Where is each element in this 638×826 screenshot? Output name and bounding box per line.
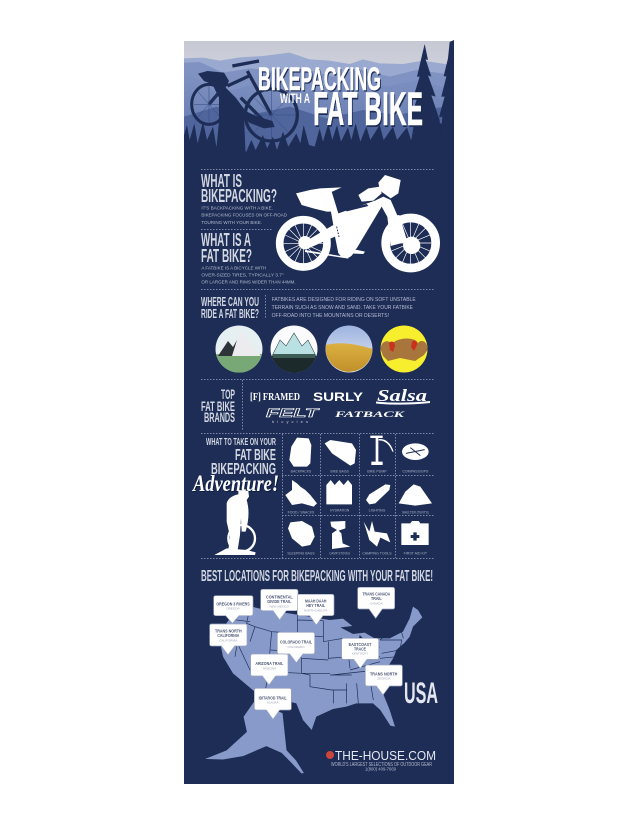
callout: Oregon Loop: OREGON <box>226 607 240 611</box>
icon: food and snacks <box>285 480 317 507</box>
heading: what to take: BIKEPACKING <box>211 461 276 478</box>
callout: Oregon Loop: OREGON 3 RIVERS <box>216 602 250 607</box>
callout: Iditarod Trail: ALASKA <box>267 701 278 705</box>
text block: bikepacking definition: IT'S BACKPACKING WITH A BIKE. <box>201 205 273 211</box>
icon: camp stove <box>330 521 350 549</box>
callout: Maah Daah Hey Trail: NORTH DAKOTA <box>304 609 327 613</box>
gear labels: CAMP STOVES <box>329 551 350 556</box>
text block: bikepacking definition <box>201 205 287 226</box>
heading: what to take: Adventure! <box>192 472 280 497</box>
callout: Continental Divide Trail: CONTINENTAL <box>266 594 293 599</box>
callout: Trans Canada Trail: TRAIL <box>371 596 382 601</box>
callout: Eastcoast Trace: KENTUCKY <box>352 652 368 656</box>
icon: lighting torch <box>366 484 390 504</box>
icon: desert circle <box>326 326 372 372</box>
icon: hydration bottles <box>326 480 352 504</box>
heading: what to take: FAT BIKE <box>235 447 276 464</box>
callout: Colorado Trail: COLORADO TRAIL <box>280 640 312 645</box>
callout: Maah Daah Hey Trail <box>297 594 334 625</box>
title: FAT BIKE <box>313 82 423 135</box>
icon: sleeping bag <box>288 521 315 547</box>
brand logos: [F] FRAMED <box>250 392 300 403</box>
heading: top fat bike brands: BRANDS <box>204 409 235 425</box>
brand logos: bicycles <box>272 419 308 424</box>
callout: Trans North: TRANS NORTH <box>370 671 397 676</box>
callout: Trans Canada Trail: CANADA <box>370 602 383 606</box>
text block: where to ride: FATBIKES ARE DESIGNED FOR RIDING ON SOFT UNSTABLE <box>272 297 416 303</box>
callout: Maah Daah Hey Trail: HEY TRAIL <box>306 603 325 608</box>
heading: what is bikepacking: BIKEPACKING? <box>201 186 277 206</box>
callout: Continental Divide Trail: NEW MEXICO <box>270 604 290 608</box>
gear labels: HYDRATION <box>330 507 349 512</box>
callout: Colorado Trail <box>277 632 315 663</box>
text block: where to ride: TERRAIN SUCH AS SNOW AND SAND. TAKE YOUR FATBIKE <box>272 305 413 311</box>
header bike and rider silhouette <box>192 61 297 156</box>
text block: fat bike definition <box>201 265 296 286</box>
text block: fat bike definition: OVER-SIZED TIRES, TYPICALLY 3.7" <box>201 272 284 278</box>
map of USA with Alaska <box>203 604 422 774</box>
icon: white fat bike with bags <box>280 175 436 268</box>
label: USA: USA <box>404 677 438 710</box>
callout: Trans North California <box>210 624 247 655</box>
heading: where can you ride: WHERE CAN YOU <box>201 294 259 309</box>
gear labels: BIKE BAGS <box>330 468 349 473</box>
footer logo: The-House.com <box>326 748 436 772</box>
icon: backpack <box>289 438 311 467</box>
gear labels: FIRST AID KIT <box>404 551 427 556</box>
footer logo: The-House.com: WORLD'S LARGEST SELECTIONS OF OUTDOOR GEAR <box>331 762 432 768</box>
heading: what is a fat bike: WHAT IS A <box>201 230 251 250</box>
title: WITH A <box>280 90 310 106</box>
gear labels: CAMPING TOOLS <box>362 551 392 556</box>
gear grid icons and labels <box>285 436 432 556</box>
text block: where to ride <box>272 297 416 319</box>
text block: bikepacking definition: TOURING WITH YOUR BIKE. <box>201 220 262 226</box>
callout: Arizona Trail <box>251 654 288 685</box>
decorative grid lines <box>282 434 435 558</box>
heading: what to take <box>191 436 280 497</box>
icon: compass <box>402 443 429 460</box>
heading: what to take: Adventure! <box>191 471 279 496</box>
heading: what is a fat bike <box>201 230 252 266</box>
gear labels <box>287 468 429 556</box>
gear labels: BIKE PUMP <box>367 468 387 473</box>
text block: fat bike definition: A FATBIKE IS A BICYCLE WITH <box>201 265 267 271</box>
icon: green mountain circle <box>216 326 262 373</box>
callout: Iditarod Trail <box>254 688 291 719</box>
brand logos: FATBACK <box>333 409 406 419</box>
heading: what to take: WHAT TO TAKE ON YOUR <box>206 436 276 448</box>
gear labels: SHELTER (TENTS) <box>402 510 429 515</box>
callout: Arizona Trail: ARIZONA TRAIL <box>255 661 284 666</box>
icon: canyon circle <box>380 326 428 372</box>
callout: Eastcoast Trace <box>342 638 379 668</box>
map state borders <box>222 607 405 703</box>
icon: first aid cross <box>411 532 419 541</box>
header illustration: mountains and forest <box>184 40 454 160</box>
icon: bike bags <box>325 440 356 466</box>
callout: Trans North California: CALIFORNIA <box>217 633 240 638</box>
callout: Trans Canada Trail: TRANS CANADA <box>362 592 391 597</box>
heading: where can you ride: RIDE A FAT BIKE? <box>201 306 259 321</box>
title: BIKEPACKING <box>258 61 381 97</box>
panel: navy poster background <box>184 41 454 784</box>
title: FAT BIKE <box>314 84 424 137</box>
callout: Trans North California: TRANS NORTH <box>215 628 242 633</box>
gear labels: LIGHTING <box>369 507 385 512</box>
callout: Continental Divide Trail: DIVIDE TRAIL <box>267 599 292 604</box>
brand logos <box>250 386 430 424</box>
gear labels: COMPASS/GPS <box>402 468 429 473</box>
brand logos: SURLY <box>313 390 363 404</box>
heading: where can you ride <box>201 294 259 321</box>
title: BIKEPACKING <box>259 62 382 98</box>
title <box>258 61 424 137</box>
icon: snowy mountain circle <box>270 326 318 373</box>
callout: Oregon Loop <box>214 596 253 623</box>
brand logos: Salsa <box>377 386 428 405</box>
icon: first aid kit <box>401 521 429 545</box>
callout: Eastcoast Trace: EASTCOAST <box>349 642 372 647</box>
callout: Trans North: GEORGIA <box>377 677 391 681</box>
forest silhouette <box>184 122 454 160</box>
heading: what is a fat bike: FAT BIKE? <box>201 246 252 266</box>
text block: bikepacking definition: BIKEPACKING FOCUSES ON OFF-ROAD <box>201 213 287 219</box>
callout: Continental Divide Trail <box>261 589 298 620</box>
heading: top fat bike brands: FAT BIKE <box>201 398 235 414</box>
callout: Arizona Trail: ARIZONA <box>263 666 276 670</box>
gear labels: FOOD / SNACKS <box>288 510 315 515</box>
icon: bike pump <box>370 436 394 465</box>
icon: camping tools <box>364 521 390 547</box>
footer logo: The-House.com: 1(800) 409-7669 <box>365 766 396 772</box>
callout: Maah Daah Hey Trail: MAAH DAAH <box>305 598 326 603</box>
text block: fat bike definition: OR LARGER AND RIMS WIDER THAN 44MM. <box>201 280 296 286</box>
callout: Iditarod Trail: IDITAROD TRAIL <box>259 695 287 700</box>
icon: shelter tent <box>399 484 432 506</box>
gear labels: SLEEPING BAGS <box>287 551 315 556</box>
icon: rider standing with bike <box>214 490 256 555</box>
heading: what is bikepacking <box>201 171 277 206</box>
callouts on the map <box>210 587 402 719</box>
callout: Trans North California: CALIFORNIA <box>219 639 237 643</box>
callout: Eastcoast Trace: TRACE <box>354 646 366 651</box>
callout: Trans Canada Trail <box>358 587 395 618</box>
gear labels: BACKPACKS <box>291 468 312 473</box>
brand logos: FELT <box>266 406 321 420</box>
heading: top fat bike brands <box>201 386 235 425</box>
text: TOP <box>221 386 235 402</box>
heading: what is bikepacking: WHAT IS <box>201 171 242 191</box>
text block: where to ride: OFF-ROAD INTO THE MOUNTAINS OR DESERTS! <box>272 313 389 319</box>
callout: Trans North <box>365 665 402 695</box>
callout: Colorado Trail: COLORADO <box>287 645 305 649</box>
footer logo: The-House.com: THE-HOUSE.COM <box>335 748 436 763</box>
